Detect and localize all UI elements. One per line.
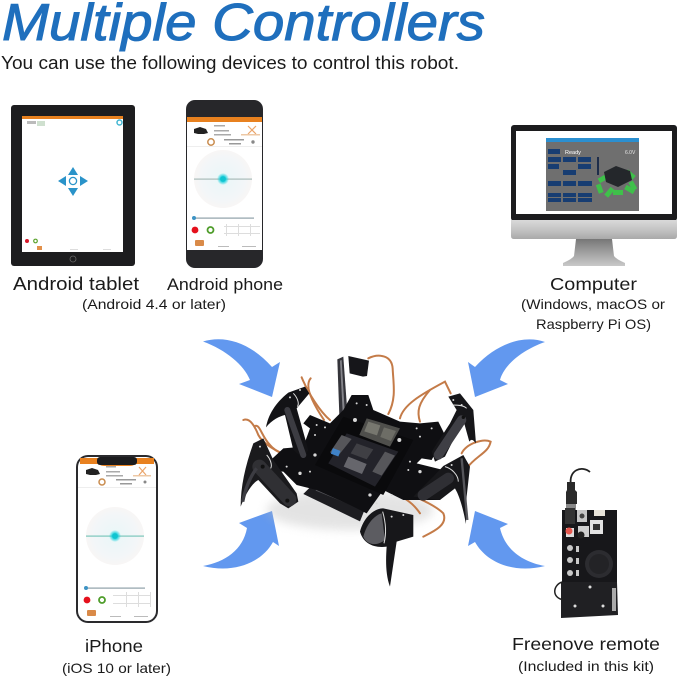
label: iPhone: iPhone	[85, 636, 143, 656]
arrow: bottom left	[203, 511, 279, 569]
device: Android tablet	[11, 105, 135, 266]
cable and plug	[566, 469, 590, 510]
button grid	[567, 545, 579, 576]
app window	[546, 138, 639, 211]
device: Android phone	[186, 100, 263, 268]
lower chassis	[303, 484, 367, 521]
icon: robot in green ring	[596, 166, 637, 198]
label: Computer systems	[521, 296, 665, 332]
mounting holes	[259, 389, 463, 518]
body plate	[260, 395, 457, 513]
top plate and circuit board	[315, 417, 413, 495]
arrow: bottom right	[468, 511, 545, 569]
leg: left	[241, 438, 298, 508]
label: Android phone: Android phone	[167, 276, 283, 294]
joystick	[585, 550, 613, 578]
device: computer monitor	[511, 125, 677, 266]
shadow	[267, 490, 433, 530]
label: Included in kit: (Included in this kit)	[518, 658, 654, 674]
label: Computer systems: Raspberry Pi OS)	[536, 316, 651, 332]
icon: robot logo	[86, 468, 100, 475]
robot photo	[241, 356, 491, 587]
rear column and head servo	[337, 356, 369, 415]
label: iOS version: (iOS 10 or later)	[62, 660, 171, 676]
label: Computer systems: (Windows, macOS or	[521, 296, 665, 312]
app window: Ready	[565, 150, 581, 156]
subtitle: You can use the following devices to control this robot.	[1, 53, 459, 73]
label: Computer: Computer	[550, 274, 637, 294]
leg: back right	[432, 393, 476, 462]
label: Freenove remote: Freenove remote	[512, 634, 660, 654]
wheel	[194, 150, 252, 208]
leg: right	[413, 455, 470, 524]
arrow: top left	[203, 339, 280, 397]
label: Android tablet: Android tablet	[13, 273, 139, 294]
icon: robot logo	[194, 127, 208, 134]
arrow: top right	[468, 339, 545, 397]
battery holder	[561, 582, 618, 618]
wheel	[86, 507, 144, 565]
icon: direction pad	[58, 167, 88, 196]
device: Freenove remote	[555, 469, 618, 618]
device: iPhone	[76, 455, 158, 623]
label: Android version: (Android 4.4 or later)	[82, 296, 226, 312]
leg: front	[360, 508, 413, 587]
leg: back left	[266, 387, 309, 458]
orange wires	[243, 356, 491, 537]
app window: 6.0V	[625, 150, 636, 156]
